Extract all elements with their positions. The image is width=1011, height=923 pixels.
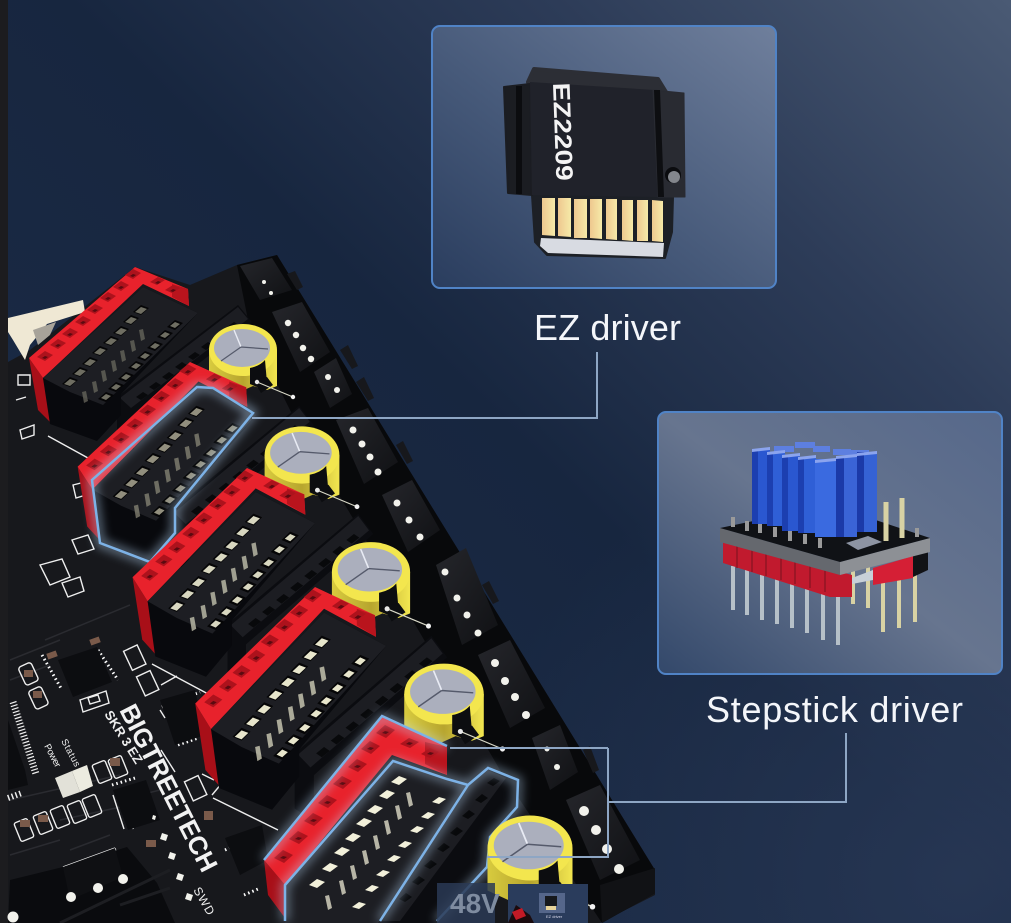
block [285, 762, 468, 923]
gold contacts [542, 198, 663, 242]
PCB silkscreen: Status [58, 737, 82, 769]
silk outlines [14, 375, 278, 877]
socket 4 [195, 587, 447, 821]
icon: EZ2209 driver module [504, 69, 685, 258]
screw connectors along edge [237, 255, 655, 923]
socket 3 [133, 468, 373, 688]
thumbnail: EZ driver [508, 884, 588, 923]
capacitor 1 [209, 324, 295, 399]
panel: Stepstick driver card [658, 412, 1002, 674]
thumbnail: 48V [437, 883, 500, 923]
red strip [264, 860, 285, 918]
motherboard render [8, 255, 655, 923]
pin rows [309, 776, 446, 910]
faint board traces [10, 605, 160, 855]
socket 2 highlighted [78, 362, 314, 572]
gold pins [853, 566, 915, 632]
callout line: EZ driver [252, 352, 597, 418]
socket 5 highlighted [264, 716, 518, 923]
ICs [8, 647, 268, 875]
icon: stepstick driver module [720, 442, 930, 645]
socket 1 [29, 267, 252, 450]
thumbnail: 48V: 48V [450, 888, 500, 919]
capacitor 3 [332, 542, 431, 629]
capacitor 2 [265, 426, 359, 509]
PCB silkscreen [8, 375, 278, 923]
heading: EZ driver: EZ driver [534, 307, 681, 348]
blue heatsink [752, 442, 877, 537]
capacitor 5 [488, 816, 595, 910]
connector pins [262, 280, 624, 874]
white JST connector [8, 300, 85, 360]
thumbnail: EZ driver: EZ driver [546, 914, 563, 919]
PCB silkscreen: SKR 3 EZ [101, 708, 146, 767]
bottom left connector [8, 847, 175, 923]
resistors [20, 636, 213, 847]
PCB silkscreen: SWD [190, 884, 218, 918]
icon: EZ2209 driver module: EZ2209 [547, 82, 577, 181]
pin combs [13, 702, 36, 774]
header strip [378, 768, 518, 923]
glow [264, 717, 518, 921]
panel: EZ driver card [432, 26, 776, 288]
silver pins [733, 566, 838, 645]
callout line: Stepstick driver [450, 733, 846, 857]
heading: Stepstick driver: Stepstick driver [706, 689, 963, 730]
status LEDs [55, 765, 93, 798]
capacitor 4 [404, 664, 505, 752]
outline [264, 716, 518, 921]
PCB silkscreen: BIGTREETECH [114, 699, 224, 877]
connector latches [287, 271, 599, 773]
white pads [152, 815, 193, 901]
PCB silkscreen: Power [41, 742, 63, 769]
board base [8, 255, 655, 923]
